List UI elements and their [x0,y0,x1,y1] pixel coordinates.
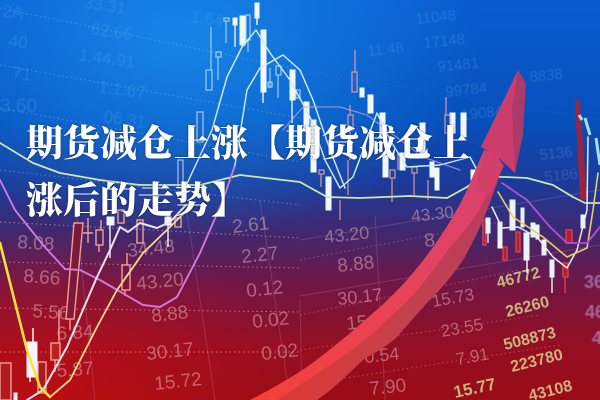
yellow data numbers: 26260 [504,294,551,321]
arrow head side face [512,70,526,173]
yellow data numbers: 223780 [509,346,565,376]
title: 期货减仓上涨【期货减仓上涨后的走势】 [26,124,470,222]
faint blue numbers: 2A [1,1,25,23]
candlestick chart: lower left outlined candles [0,210,181,400]
faint blue numbers: 06.31 [102,107,147,132]
faded red numbers: 43.20 [323,222,370,247]
faint blue numbers: 3.60 [0,96,37,117]
right yellow moving average [498,173,598,257]
arrow neck joining shaft and head [476,150,504,195]
faded red numbers: 8.88 [150,302,189,327]
faded red numbers: 8.08 [17,232,55,256]
right purple moving average [502,183,600,243]
purple side numbers [584,272,600,348]
faded red numbers: 30.17 [336,284,383,309]
yellow data numbers: 46772 [495,265,542,292]
faded red numbers: 43.20 [135,269,185,295]
faint blue numbers: 17148 [423,31,466,52]
white candles lower left [14,212,171,400]
green moving average line [0,143,600,203]
outlined candles upper centre [178,15,300,188]
faint blue numbers: 5186 [544,166,579,186]
arrow head front face [481,70,522,173]
faded red numbers: 43.30 [410,203,455,226]
yellow data numbers [452,265,574,400]
faded red numbers: 5.87 [56,358,94,382]
faded red numbers: 2.27 [240,243,279,268]
faded red numbers: 0.02 [251,308,290,333]
faint blue numbers: 1.44.91 [77,45,136,72]
pale continuation of the rising line [235,55,345,188]
pale blue peak line [184,30,477,190]
faded red numbers: 0.12 [245,277,284,302]
yellow data numbers: 508873 [502,324,558,354]
faded red numbers [17,203,490,400]
faded red numbers: 6.84 [56,321,95,345]
white ascending line [27,205,186,400]
faded red numbers: 34.48 [126,236,176,262]
faded red numbers: 30.17 [145,339,195,365]
faint purple arc [283,107,460,170]
red outlined candles upper centre [319,50,450,220]
faded red numbers: 15 [345,312,369,335]
faint blue numbers: 99784 [445,80,488,101]
faint blue numbers: 1.1.67 [97,77,147,103]
faded red numbers: 7.90 [368,375,407,400]
right white moving average [492,137,588,268]
faint blue numbers: 11.48 [367,39,405,60]
yellow left steep segment [0,243,50,397]
faded red numbers: 0.02 [260,340,299,365]
faded red numbers: 8 [423,230,436,252]
faint blue numbers: 62.66 [89,19,134,44]
faint blue numbers: 71 [11,63,33,85]
candlestick chart: right group [483,100,600,293]
faded red numbers: 0.54 [363,343,400,367]
faded red numbers: 2.61 [231,213,270,238]
faded red numbers: 23.55 [439,315,485,341]
faint blue numbers: 40 [7,31,29,53]
faded red numbers: 7.91 [454,344,490,369]
faded red numbers: 5.56 [32,301,70,325]
faint blue numbers: 11048 [415,7,457,28]
large red rising arrow [250,70,526,400]
faint blue numbers [0,0,579,186]
white candles upper centre [233,3,476,210]
faded red numbers: 15.72 [153,369,203,395]
faint blue numbers: 8838 [529,66,564,86]
faint blue numbers: 91481 [437,55,480,76]
arrow shaft bright band [250,150,500,400]
faint blue numbers: 5136 [539,144,574,164]
faded red numbers: 8.88 [336,252,375,277]
arrow shaft shaded band [272,165,503,400]
faded red numbers: 8.66 [23,266,61,290]
faint blue numbers: 1.64 [189,7,225,31]
faded red numbers: 15.73 [430,285,476,311]
pale orange line [50,210,187,397]
faint blue numbers: 19084 [461,103,504,124]
magenta moving average line [0,165,235,307]
